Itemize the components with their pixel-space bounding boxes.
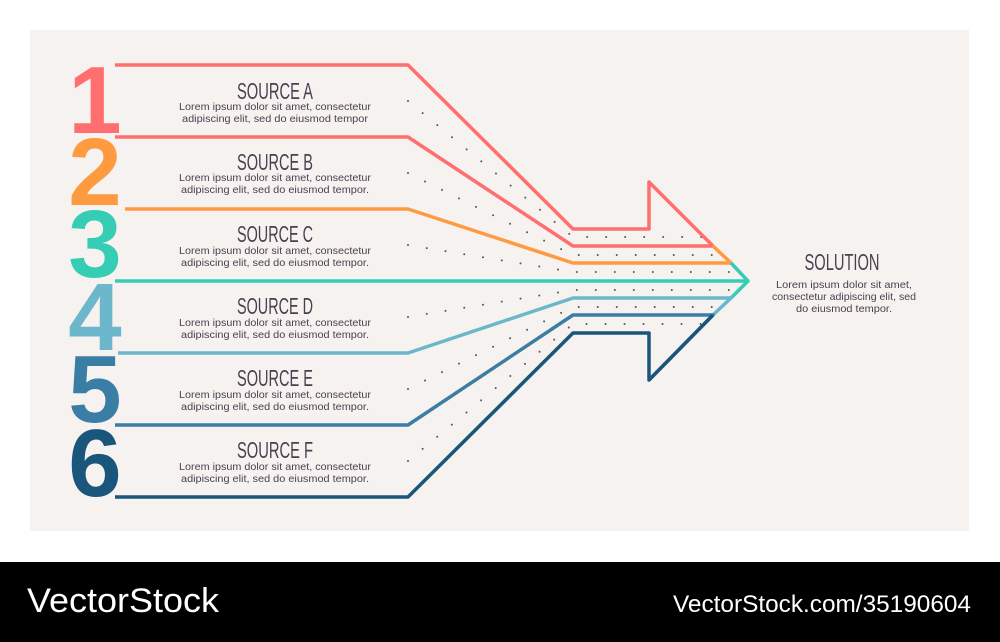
line 3 (125, 209, 731, 263)
numbers (68, 47, 122, 517)
source C (179, 221, 372, 269)
solution: Lorem ipsum dolor sit amet, (776, 279, 912, 291)
line 4 (115, 263, 748, 298)
arrow lines (115, 65, 748, 497)
line 1 (115, 65, 713, 246)
source E (179, 365, 372, 413)
line 5 (118, 298, 731, 353)
numbers: 5 (68, 336, 122, 443)
source D: adipiscing elit, sed do eiusmod tempor. (181, 329, 369, 341)
dots pattern (408, 101, 740, 461)
footer bar: VectorStock (27, 582, 220, 620)
source A: Lorem ipsum dolor sit amet, consectetur (179, 101, 372, 113)
source A: adipiscing elit, sed do eiusmod tempor (182, 113, 369, 125)
source texts (179, 78, 916, 485)
footer bar: VectorStock.com/35190604 (673, 591, 971, 618)
source E: adipiscing elit, sed do eiusmod tempor. (181, 401, 369, 413)
numbers: 1 (68, 47, 122, 154)
line 7 (115, 315, 713, 497)
source D: Lorem ipsum dolor sit amet, consectetur (179, 317, 372, 329)
source F: SOURCE F (237, 437, 313, 463)
source B (179, 149, 372, 196)
source F (179, 437, 372, 485)
source B: Lorem ipsum dolor sit amet, consectetur (179, 172, 372, 184)
source A: SOURCE A (237, 78, 313, 104)
source F: adipiscing elit, sed do eiusmod tempor. (181, 473, 369, 485)
line 6 (115, 315, 713, 425)
source D: SOURCE D (237, 293, 313, 319)
solution: do eiusmod tempor. (796, 303, 892, 315)
source E: SOURCE E (237, 365, 313, 391)
numbers: 4 (68, 264, 122, 371)
line 2 (115, 137, 713, 246)
numbers: 3 (68, 191, 122, 298)
source B: adipiscing elit, sed do eiusmod tempor. (181, 184, 369, 196)
source C: adipiscing elit, sed do eiusmod tempor. (181, 257, 369, 269)
source E: Lorem ipsum dolor sit amet, consectetur (179, 389, 372, 401)
background panel (30, 30, 969, 531)
numbers: 2 (68, 119, 122, 226)
source A (179, 78, 372, 125)
source B: SOURCE B (237, 149, 313, 175)
source F: Lorem ipsum dolor sit amet, consectetur (179, 461, 372, 473)
source D (179, 293, 372, 341)
solution: SOLUTION (804, 249, 880, 275)
solution: consectetur adipiscing elit, sed (772, 291, 916, 303)
footer bar (0, 562, 1000, 642)
solution (772, 249, 916, 315)
numbers: 6 (68, 410, 122, 517)
source C: SOURCE C (237, 221, 313, 247)
source C: Lorem ipsum dolor sit amet, consectetur (179, 245, 372, 257)
